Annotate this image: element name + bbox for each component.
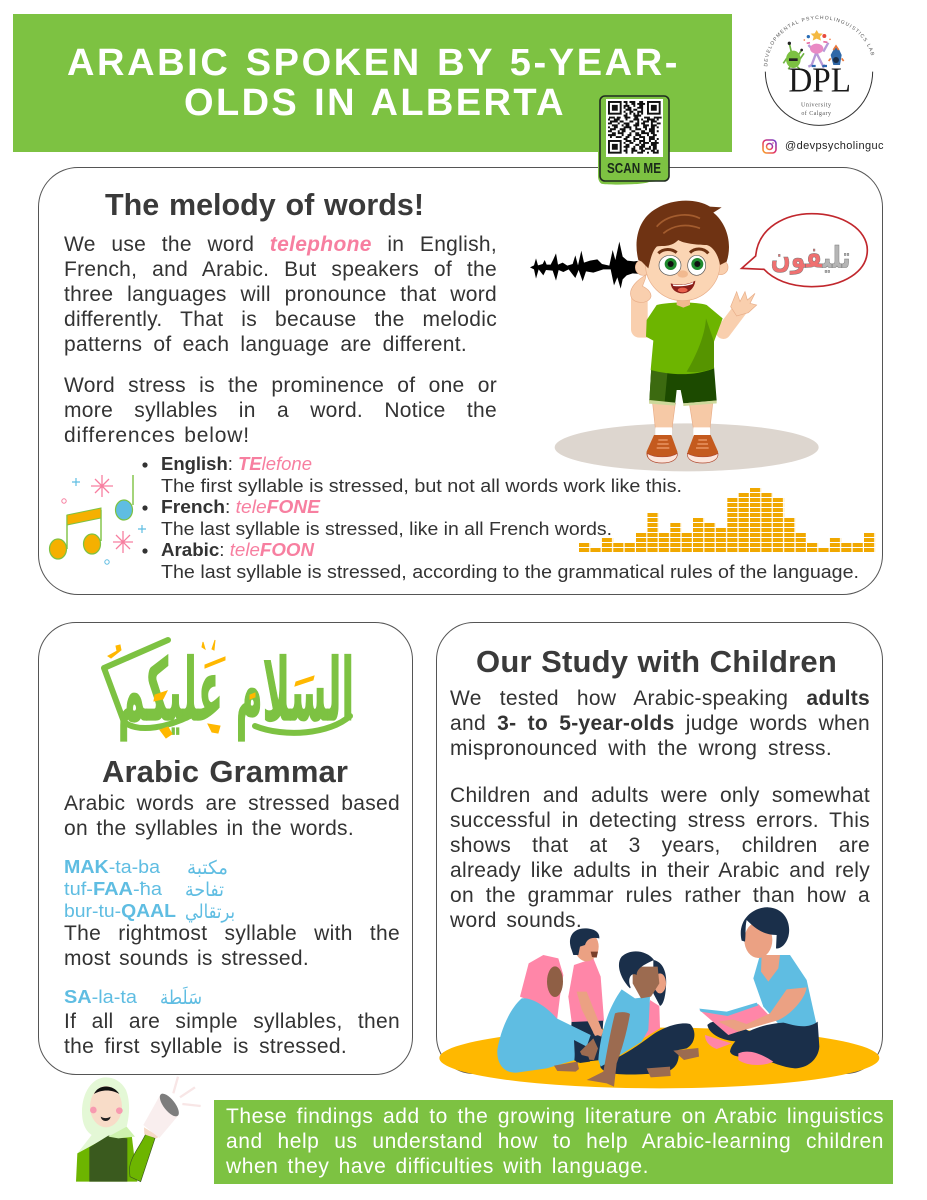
panel: the melody of words [38, 167, 883, 595]
shirt [646, 302, 723, 374]
chart: equalizer bars [579, 488, 876, 552]
bullet list: stress by language: The first syllable is stressed, but not all words work like this. [161, 476, 682, 496]
callout: findings banner: and help us understand how to help Arabic-learning children [226, 1130, 884, 1153]
title [67, 42, 680, 124]
text block: melody intro [64, 233, 497, 356]
icon: QR code scan me [598, 95, 670, 185]
examples: closed syllable words: مكتبة [187, 858, 228, 879]
example: simple syllable word: SA-la-ta [64, 987, 138, 1007]
head and face [635, 259, 651, 275]
text block: simple syllable rule: the first syllable is stressed. [64, 1035, 347, 1058]
blue monster [829, 46, 844, 65]
text block: word stress [64, 374, 497, 447]
instagram text: @devpsycholinguc [785, 140, 884, 152]
text block: melody intro: We use the word telephone in English, [64, 233, 497, 256]
standing child [568, 928, 604, 1063]
examples: closed syllable words: تفاحة [185, 880, 224, 901]
panel: arabic grammar [38, 622, 413, 1075]
text block: grammar intro: Arabic words are stressed based [64, 792, 400, 815]
logo: Developmental Psycholinguistics Lab [764, 16, 874, 126]
text block: study findings [450, 784, 870, 932]
text block: melody intro: French, and Arabic. But speakers of the [64, 258, 497, 281]
instagram handle [762, 139, 884, 154]
bullet list: stress by language: The last syllable is stressed, according to the grammatical rules of the language. [161, 562, 859, 582]
icon: instagram [762, 139, 777, 154]
text block: melody intro: differently. That is because the melodic [64, 308, 497, 331]
text block: simple syllable rule: If all are simple syllables, then [64, 1010, 400, 1033]
text block: grammar intro: on the syllables in the words. [64, 817, 354, 840]
examples: closed syllable words: برتقالي [185, 902, 235, 923]
example: simple syllable word: سَلَطة [160, 986, 202, 1009]
bullet list: stress by language: The last syllable is stressed, like in all French words. [161, 519, 612, 539]
illustration: boy listening to waveform [530, 200, 868, 472]
yellow mat [439, 1028, 879, 1088]
panel: our study with children [436, 622, 883, 1074]
text block: word stress: more syllables in a word. Notice the [64, 399, 497, 422]
heading: our study: Our Study with Children [476, 644, 837, 679]
calligraphy: as-salaamu alaykum: السلام عليكم [118, 641, 354, 741]
heading: arabic grammar: Arabic Grammar [102, 754, 348, 789]
text block: study findings: shows that at 3 years, children are [450, 834, 870, 857]
text block: study findings: word sounds. [450, 909, 582, 932]
small girl behind [643, 960, 666, 1038]
bullet list: stress by language: French: teleFONE [161, 497, 321, 517]
teacher [699, 907, 819, 1068]
icon: music notes [48, 475, 146, 565]
icon: QR code scan me: SCAN ME [607, 160, 661, 177]
text block: study findings: already like adults in their Arabic and rely [450, 859, 870, 882]
examples: closed syllable words: MAK-ta-ba [64, 857, 161, 877]
child sitting centre [587, 951, 699, 1087]
arabic word telefoon: تليفون [771, 240, 851, 274]
logo: Developmental Psycholinguistics Lab: of Calgary [801, 110, 831, 117]
speech bubble [742, 214, 867, 287]
text block: rightmost rule [64, 922, 400, 970]
text block: rightmost rule: The rightmost syllable with the [64, 922, 400, 945]
text block: study findings: successful in detecting stress errors. This [450, 809, 870, 832]
girl in hijab [497, 955, 598, 1073]
text block: simple syllable rule [64, 1010, 400, 1058]
callout: findings banner: when they have difficulties with language. [226, 1155, 649, 1178]
examples: closed syllable words: tuf-FAA-ħa [64, 879, 163, 899]
ground shadow [555, 423, 819, 471]
text block: grammar intro [64, 792, 400, 840]
text block: word stress: differences below! [64, 424, 250, 447]
text block: rightmost rule: most sounds is stressed. [64, 947, 309, 970]
shorts [649, 367, 717, 405]
bullet list: stress by language: Arabic: teleFOON [161, 540, 315, 560]
title: OLDS IN ALBERTA [184, 82, 566, 124]
legs [653, 403, 713, 428]
text block: melody intro: three languages will pronounce that word [64, 283, 497, 306]
text block: study method: mispronounced with the wrong stress. [450, 737, 832, 760]
text block: study method: and 3- to 5-year-olds judge words when [450, 712, 870, 735]
callout: findings banner [214, 1100, 893, 1184]
bullet list: stress by language [142, 454, 859, 582]
callout: findings banner: These findings add to the growing literature on Arabic linguistics [226, 1105, 884, 1128]
text block: study findings: on the grammar rules rather than how a [450, 884, 870, 907]
title: ARABIC SPOKEN BY 5‑YEAR‑ [67, 42, 680, 84]
logo: Developmental Psycholinguistics Lab: DEVELOPMENTAL PSYCHOLINGUISTICS LAB [764, 16, 874, 66]
logo: Developmental Psycholinguistics Lab: DPL [788, 62, 851, 100]
stars [803, 30, 831, 41]
text block: study method: We tested how Arabic-speaking adults [450, 687, 870, 710]
title banner [13, 14, 732, 152]
text block: study findings: Children and adults were only somewhat [450, 784, 870, 807]
text block: study method [450, 687, 870, 760]
logo: Developmental Psycholinguistics Lab: University [801, 102, 832, 108]
sound waveform [530, 242, 640, 289]
bullet list: stress by language: English: TElefone [161, 454, 312, 474]
shoes [646, 435, 677, 463]
pink monster [807, 42, 828, 67]
calligraphy: as-salaamu alaykum [101, 637, 354, 742]
text block: word stress: Word stress is the prominence of one or [64, 374, 497, 397]
text block: melody intro: patterns of each language are different. [64, 333, 467, 356]
arms [639, 297, 654, 329]
green monster [783, 42, 804, 69]
heading: melody: The melody of words! [105, 188, 424, 222]
examples: closed syllable words: bur-tu-QAAL [64, 901, 176, 921]
